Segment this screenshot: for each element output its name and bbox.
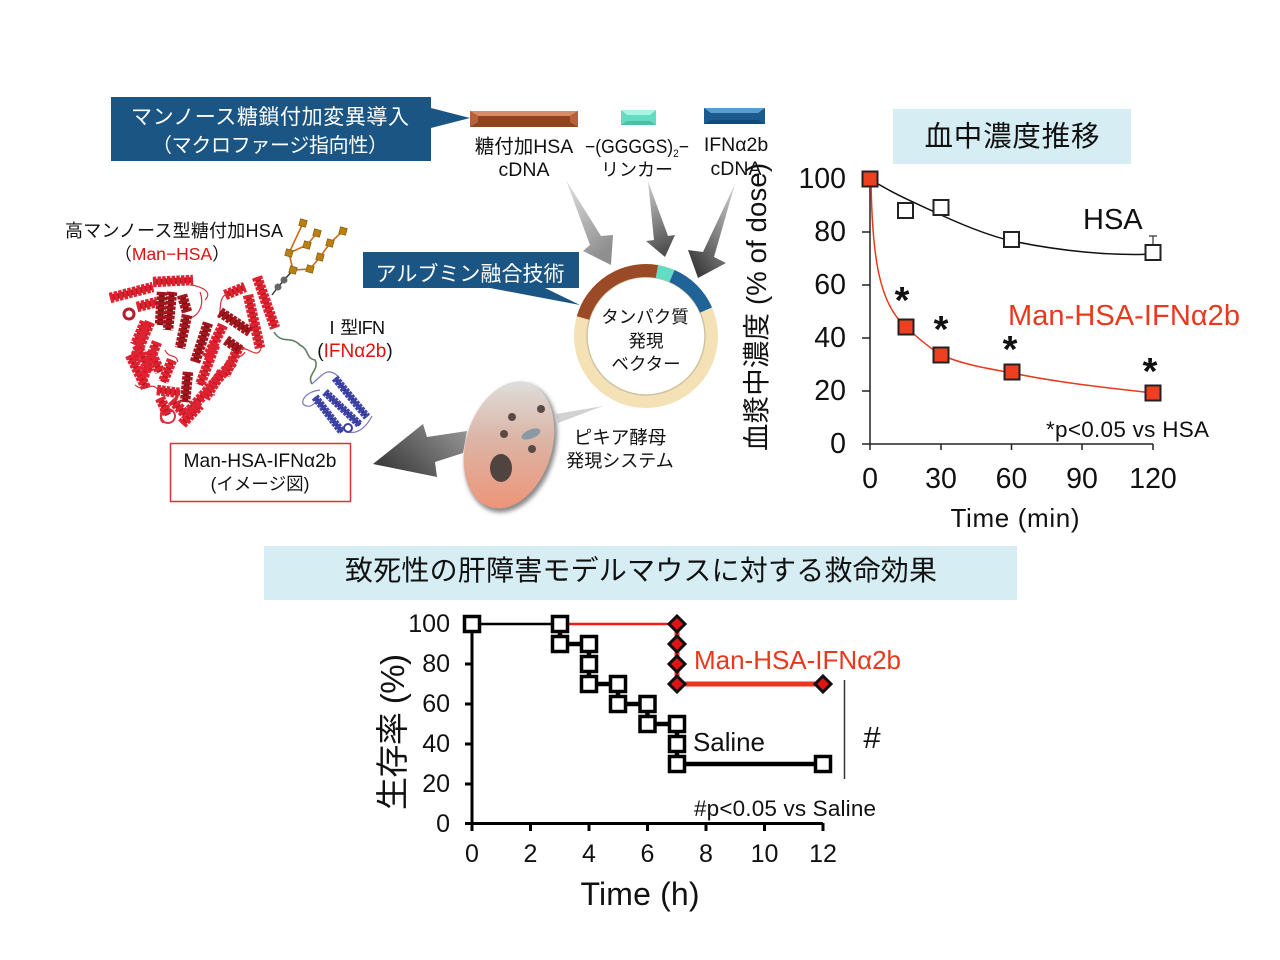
protein ribbon: IFN alpha 2b [303, 372, 372, 432]
heading: blood concentration: 血中濃度推移 [924, 121, 1100, 153]
callout: mannose glycan mutation: （マクロファージ指向性） [152, 134, 388, 157]
plasmid expression vector: タンパク質 [601, 307, 689, 327]
heading: blood concentration [893, 109, 1131, 164]
significance bracket: # [863, 720, 881, 755]
HSA series [870, 179, 1160, 260]
x axis title: Time (h) [580, 876, 700, 912]
y tick labels: 100 [408, 610, 450, 638]
callout: albumin fusion technology [363, 252, 580, 305]
series label Man-HSA-IFNa2b: Man-HSA-IFNα2b [1008, 300, 1240, 332]
significance stars: * [1003, 329, 1018, 371]
protein ribbon: mannose-HSA [110, 277, 275, 424]
x tick labels: 4 [582, 840, 596, 868]
plasmid expression vector: 発現 [628, 331, 664, 351]
y tick labels: 60 [422, 690, 450, 718]
gene bar: IFNa2b cDNA [704, 108, 768, 180]
label: Pichia yeast expression system [566, 427, 674, 471]
axes [862, 179, 1153, 450]
gene bar: GGGGS linker: −(GGGGS) [585, 137, 681, 158]
x tick labels: 10 [751, 840, 778, 868]
y tick labels: 20 [422, 770, 450, 798]
significance stars: * [895, 280, 910, 322]
x tick labels: 8 [699, 840, 713, 868]
y axis title: 生存率 (%) [374, 654, 411, 810]
label: high mannose HSA: 高マンノース型糖付加HSA [65, 221, 283, 241]
Saline series [464, 616, 830, 772]
Man-HSA-IFNa2b series [862, 172, 1160, 400]
gene bar: IFNa2b cDNA: cDNA [711, 158, 761, 180]
arrow: HSA into vector [566, 180, 613, 265]
gene bar: glycosylated HSA cDNA: cDNA [499, 159, 549, 181]
gene bar: GGGGS linker: リンカー [601, 160, 673, 180]
label: high mannose HSA [65, 221, 283, 264]
significance stars: * [1143, 351, 1158, 393]
box: Man-HSA-IFNa2b image: Man-HSA-IFNα2b [184, 451, 336, 472]
wedge: vector to yeast [556, 406, 603, 423]
y axis title: 血漿中濃度 (% of dose) [741, 163, 772, 451]
box: Man-HSA-IFNa2b image: (イメージ図) [211, 474, 309, 494]
gene bar: GGGGS linker: 2 [673, 148, 679, 160]
gene bar: glycosylated HSA cDNA [470, 111, 578, 181]
glycan chain [272, 219, 347, 295]
callout: mannose glycan mutation: マンノース糖鎖付加変異導入 [131, 106, 409, 129]
x tick labels: 90 [1066, 463, 1098, 495]
gene bar: glycosylated HSA cDNA: 糖付加HSA [475, 136, 573, 158]
significance stars: * [934, 309, 949, 351]
arrow: linker into vector [646, 181, 675, 257]
survival chart [374, 610, 901, 912]
y tick labels: 0 [830, 428, 846, 460]
p-value note: #p<0.05 vs Saline [694, 796, 876, 821]
yeast cell [449, 370, 572, 524]
significance stars [895, 280, 1158, 393]
x tick labels [862, 463, 1177, 495]
series label HSA: HSA [1083, 204, 1143, 236]
series label Man-HSA-IFNa2b: Man-HSA-IFNα2b [694, 645, 901, 675]
x tick labels [465, 840, 837, 868]
x tick labels: 2 [524, 840, 537, 868]
plasmid expression vector: ベクター [611, 354, 681, 374]
axes [465, 624, 823, 831]
x tick labels: 6 [641, 840, 654, 868]
gene bar: IFNa2b cDNA: IFNα2b [704, 134, 768, 156]
callout: albumin fusion technology: アルブミン融合技術 [376, 263, 564, 286]
label: type I IFN [317, 318, 393, 362]
label: high mannose HSA: （Man−HSA） [114, 244, 230, 264]
linker peptide [274, 332, 316, 384]
series label Saline: Saline [693, 727, 765, 757]
y tick labels: 40 [422, 730, 450, 758]
arrow: IFN into vector [688, 184, 735, 278]
y tick labels [408, 610, 450, 838]
y tick labels: 100 [798, 163, 846, 195]
Man-HSA-IFNa2b series [560, 616, 831, 692]
p-value note: *p<0.05 vs HSA [1046, 417, 1209, 442]
y tick labels: 20 [814, 375, 846, 407]
heading: survival effect: 致死性の肝障害モデルマウスに対する救命効果 [345, 555, 937, 586]
y tick labels: 80 [814, 216, 846, 248]
heading: survival effect [264, 546, 1017, 600]
callout: mannose glycan mutation [111, 97, 470, 161]
label: type I IFN: Ⅰ型IFN [323, 318, 385, 338]
y tick labels: 80 [422, 650, 450, 678]
y tick labels: 40 [814, 322, 846, 354]
gene bar: GGGGS linker: − [679, 137, 689, 158]
line chart: plasma concentration [741, 163, 1240, 533]
box: Man-HSA-IFNa2b image [170, 444, 350, 502]
arrow: yeast to product [373, 424, 467, 477]
x tick labels: 120 [1129, 463, 1177, 495]
label: type I IFN: (IFNα2b) [317, 341, 393, 362]
significance bracket [844, 680, 881, 779]
x tick labels: 0 [465, 840, 479, 868]
label: Pichia yeast expression system: ピキア酵母 [574, 427, 666, 448]
gene bar: GGGGS linker [585, 110, 689, 180]
x tick labels: 0 [862, 463, 878, 495]
x axis title: Time (min) [950, 503, 1080, 533]
y tick labels [798, 163, 846, 460]
y tick labels: 60 [814, 269, 846, 301]
plasmid expression vector [580, 270, 712, 402]
label: Pichia yeast expression system: 発現システム [566, 451, 674, 471]
y tick labels: 0 [436, 810, 450, 838]
x tick labels: 30 [925, 463, 957, 495]
x tick labels: 60 [996, 463, 1027, 495]
x tick labels: 12 [809, 840, 837, 868]
